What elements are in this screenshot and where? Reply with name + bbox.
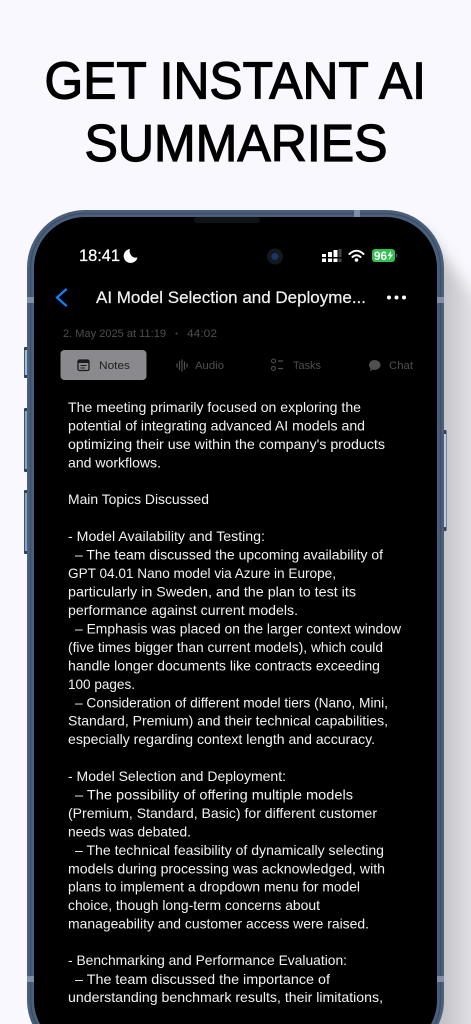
meeting summary text: Standard, Premium) and their technical capabilities,: [68, 712, 388, 728]
meeting summary text: models during processing was acknowledged, with: [68, 860, 385, 876]
meeting summary text: potential of integrating advanced AI models and: [68, 418, 365, 434]
meeting summary text: 100 pages.: [68, 676, 135, 692]
tab: notes: [60, 350, 146, 380]
meeting summary text: (Premium, Standard, Basic) for different customer: [68, 805, 377, 821]
meeting summary text: and workflows.: [68, 454, 161, 470]
meeting summary text: particularly in Sweden, and the plan to test its: [68, 584, 356, 600]
icon: signal: [322, 249, 342, 262]
title: SUMMARIES: [84, 114, 388, 172]
frame antenna bands: [27, 210, 444, 982]
tabs: [60, 350, 413, 380]
tab: chat: [369, 360, 413, 372]
meeting summary text: (five times bigger than current models), which could: [68, 639, 383, 655]
meeting summary text: Main Topics Discussed: [68, 491, 209, 507]
meeting summary text: – The team discussed the importance of: [75, 971, 330, 987]
meeting summary text: – The technical feasibility of dynamically selecting: [75, 842, 384, 858]
meeting summary text: manageability and customer access were raised.: [68, 916, 369, 932]
tab: tasks: [272, 359, 321, 372]
meeting summary text: - Model Selection and Deployment:: [68, 768, 286, 784]
meeting summary text: - Benchmarking and Performance Evaluation:: [68, 952, 347, 968]
meeting summary text: – Consideration of different model tiers (Nano, Mini,: [75, 694, 388, 710]
meeting summary text: – The team discussed the upcoming availability of: [75, 546, 383, 562]
title: [44, 52, 426, 172]
date and duration: 44:02: [187, 328, 217, 340]
tab: notes: Notes: [99, 360, 131, 372]
title: GET INSTANT AI: [44, 52, 426, 110]
meeting summary text: plans to implement a dropdown menu for model: [68, 878, 360, 894]
tab: chat: Chat: [389, 360, 413, 372]
meeting summary text: choice, though long-term concerns about: [68, 897, 320, 913]
icon: battery: [372, 249, 397, 263]
note title: AI Model Selection and Deployme...: [96, 289, 366, 307]
meeting summary text: needs was debated.: [68, 824, 191, 840]
meeting summary text: – The possibility of offering multiple models: [75, 786, 353, 802]
tab: audio: [177, 360, 224, 372]
icon: moon: [124, 249, 138, 263]
meeting summary text: [68, 399, 402, 1005]
meeting summary text: GPT 04.01 Nano model via Azure in Europe,: [68, 565, 336, 581]
phone screen: [34, 217, 437, 1024]
date and duration: 2. May 2025 at 11:19: [63, 328, 166, 340]
tab: tasks: Tasks: [293, 360, 321, 372]
date and duration: [63, 328, 217, 340]
navigation bar: [57, 289, 406, 307]
icon: back chevron: [57, 290, 66, 306]
tab: audio: Audio: [195, 360, 224, 372]
phone frame: [27, 210, 444, 1024]
meeting summary text: especially regarding context length and accuracy.: [68, 731, 375, 747]
phone mockup: [24, 210, 446, 1024]
icon: camera: [267, 248, 283, 264]
meeting summary text: - Model Availability and Testing:: [68, 528, 265, 544]
frame inner stripe: [30, 214, 440, 1024]
icon: battery: 96: [374, 251, 387, 263]
meeting summary text: – Emphasis was placed on the larger context window: [75, 620, 402, 636]
meeting summary text: optimizing their use within the company's products: [68, 436, 385, 452]
phone shadow: [429, 228, 471, 1024]
speaker notch: [194, 217, 260, 223]
icon: wifi: [350, 251, 364, 261]
side buttons: [24, 347, 446, 554]
icon: more dots: [387, 296, 406, 300]
meeting summary text: handle longer documents like contracts exceeding: [68, 658, 380, 674]
meeting summary text: The meeting primarily focused on exploring the: [68, 399, 361, 415]
clock: 18:41: [79, 246, 120, 265]
meeting summary text: performance against current models.: [68, 602, 298, 618]
status bar: [79, 246, 397, 265]
meeting summary text: understanding benchmark results, their limitations,: [68, 989, 383, 1005]
